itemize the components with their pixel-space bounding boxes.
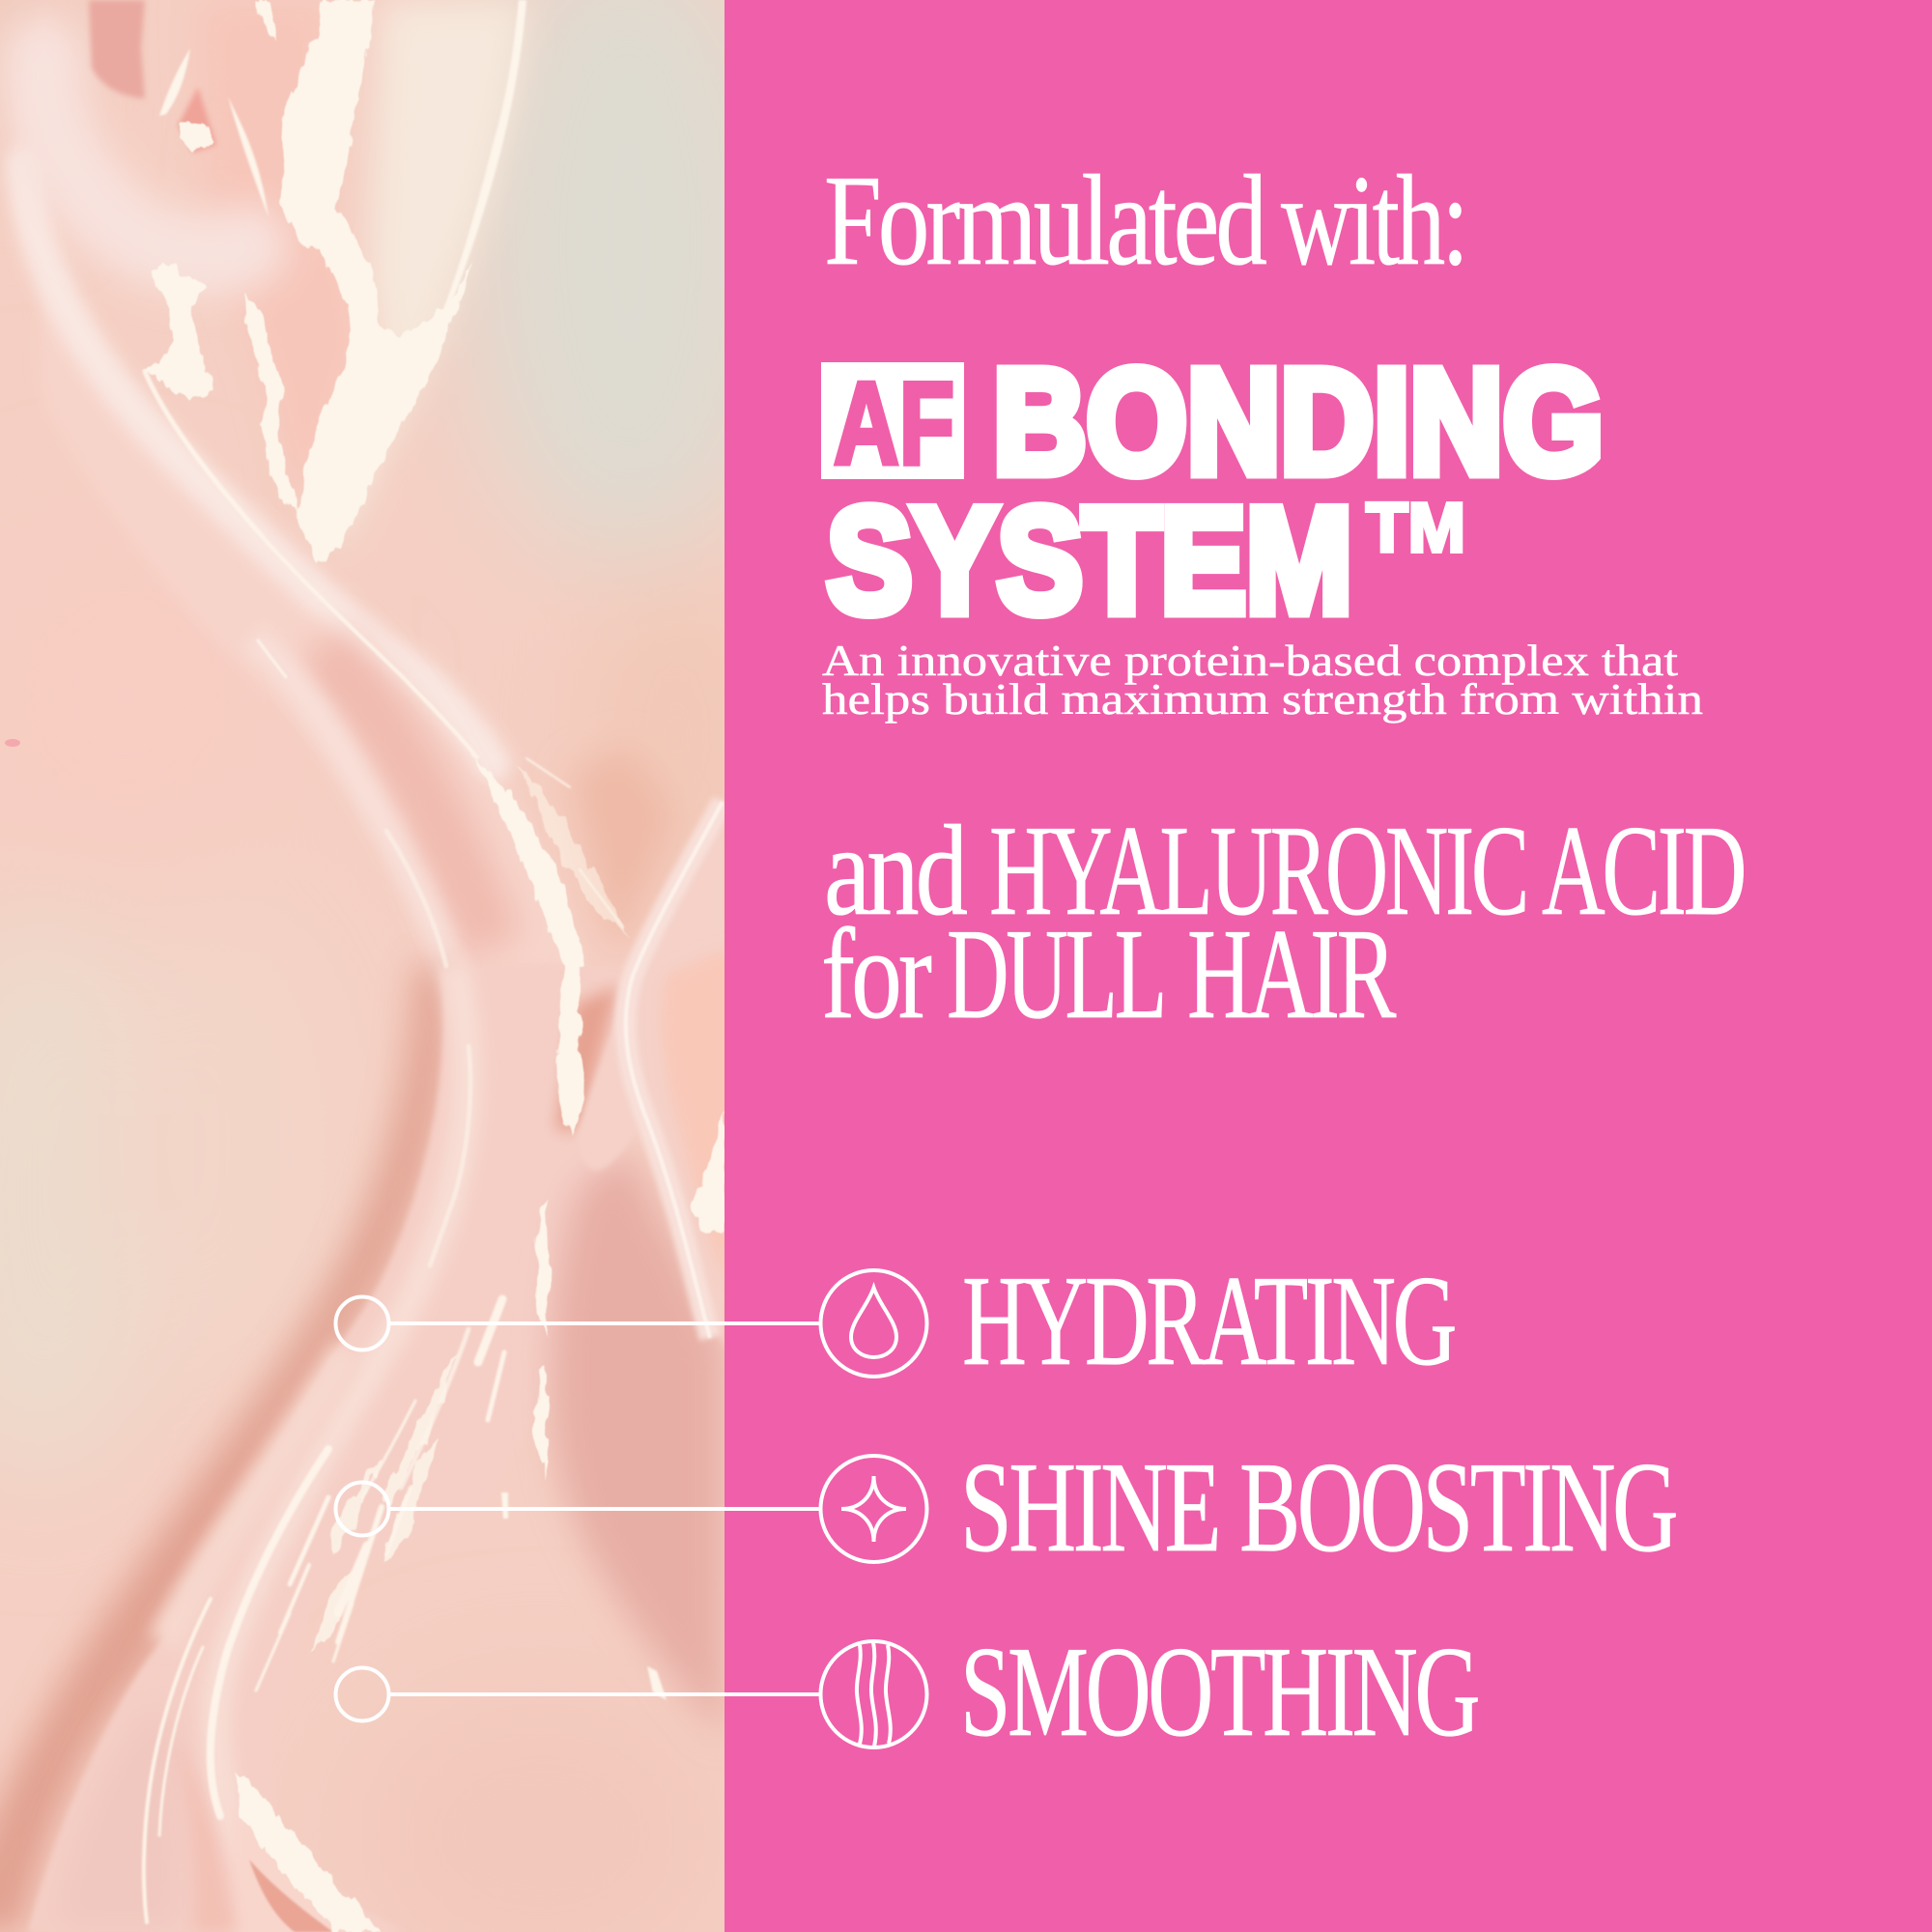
label: shine boosting: BOOSTING — [1239, 1435, 1676, 1578]
label: shine boosting — [960, 1435, 1676, 1578]
wordmark: bonding: BONDING — [993, 338, 1604, 504]
right strand — [576, 794, 734, 1348]
label: hydrating: HYDRATING — [962, 1249, 1455, 1392]
logo: AF Bonding System — [821, 338, 1604, 643]
callout: smoothing — [336, 1620, 1478, 1763]
heading: hyaluronic acid: HYALURONIC — [989, 799, 1526, 942]
wordmark: system: SYSTEM — [827, 477, 1352, 643]
crater hollows — [89, 0, 216, 153]
trademark: TM — [1366, 490, 1465, 567]
heading: hyaluronic acid: HAIR — [1187, 902, 1397, 1045]
text block: description: An innovative protein-based complex that — [822, 637, 1679, 685]
label: smoothing: SMOOTHING — [960, 1620, 1478, 1763]
pink speck — [5, 739, 20, 747]
icon: AF badge: AF — [834, 357, 954, 489]
heading: formulated with: Formulated — [824, 149, 1266, 292]
top cream wash — [221, 0, 525, 529]
heading: hyaluronic acid: DULL — [947, 902, 1164, 1045]
label: shine boosting: SHINE — [960, 1435, 1218, 1578]
ribbon: upper strand — [0, 8, 514, 971]
ribbon: lower body — [29, 968, 479, 1932]
heading: hyaluronic acid — [821, 799, 1744, 1045]
callout: shine boosting — [336, 1435, 1676, 1578]
shadow beside lower ribbon — [0, 966, 447, 1932]
icon: water drop — [821, 1270, 927, 1377]
marker and leader line — [336, 1296, 821, 1350]
icon: wavy hair strands — [821, 1641, 927, 1747]
gloss lines and scratches — [144, 372, 623, 1922]
icon: sparkle — [821, 1456, 927, 1562]
text block: description — [822, 637, 1703, 724]
heading: formulated with: with: — [1281, 149, 1465, 292]
text block: description: helps build maximum strength from within — [822, 675, 1703, 724]
marker and leader line — [336, 1482, 821, 1536]
right dark fold — [552, 744, 724, 1739]
small gloss specks — [159, 0, 667, 1700]
panel: cream texture photo — [0, 0, 792, 1932]
glossy highlights — [141, 0, 724, 1932]
heading: hyaluronic acid: for — [821, 902, 931, 1045]
panel: pink background — [724, 0, 1932, 1932]
marker and leader line — [336, 1667, 821, 1721]
heading: hyaluronic acid: ACID — [1542, 799, 1744, 942]
callout: hydrating — [336, 1249, 1455, 1392]
heading: hyaluronic acid: and — [824, 799, 967, 942]
